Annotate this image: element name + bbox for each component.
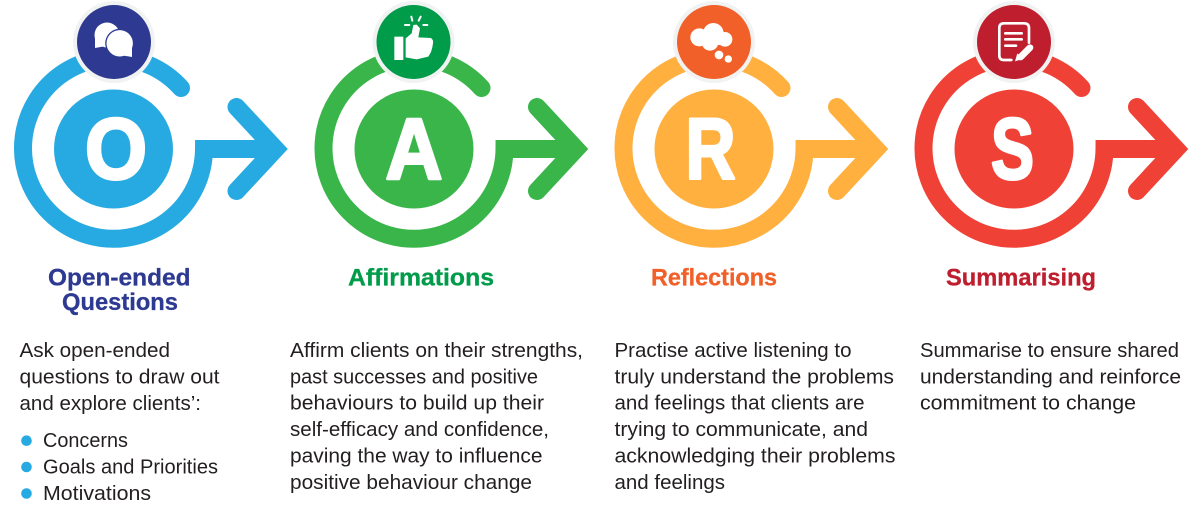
heading: open-ended questions [48,264,190,316]
text block: summarising description: Summarise to ensure shared [920,339,1179,362]
bullet list: Motivations [43,482,151,505]
text block: reflections description: and feelings [614,471,725,494]
panel: reflections [614,1,896,494]
icon: document and pen [973,1,1055,83]
icon: speech bubbles [73,1,155,83]
ring arrow O [23,58,276,239]
text block: reflections description: and feelings that clients are [614,392,864,415]
text block: affirmations description: paving the way to influence [290,444,542,467]
letter disc S [954,90,1074,208]
bullet list: Concerns [43,429,128,452]
bullet list [21,429,218,505]
icon: thought cloud [673,1,755,83]
panel: summarising [920,1,1181,415]
panel: open-ended questions [20,1,276,505]
text block: affirmations description: self-efficacy and confidence, [290,418,549,441]
text block: affirmations description: past successes and positive [290,366,538,388]
text block: open-ended description: and explore clients’: [20,392,201,415]
letter disc S: S [991,102,1034,198]
text block: reflections description: Practise active listening to [614,339,852,362]
letter disc R [654,90,774,208]
text block: open-ended description: questions to draw out [20,366,220,388]
text block: affirmations description [290,339,583,494]
text block: affirmations description: Affirm clients on their strengths, [290,339,583,362]
letter disc O: O [85,102,147,198]
heading: open-ended questions: Questions [62,289,178,316]
letter disc A [354,90,474,208]
text block: reflections description [614,339,896,494]
text block: open-ended description [20,339,220,415]
text block: reflections description: acknowledging their problems [614,444,896,467]
heading: summarising: Summarising [946,264,1096,292]
text block: reflections description: trying to communicate, and [614,418,868,441]
letter disc R: R [686,102,736,198]
text block: affirmations description: behaviours to build up their [290,392,544,415]
text block: summarising description [920,339,1181,415]
ring arrow R [624,58,876,239]
ring arrow A [324,58,576,239]
letter disc A: A [386,102,442,198]
text block: open-ended description: Ask open-ended [20,339,170,362]
bullet list: Goals and Priorities [43,456,218,478]
text block: affirmations description: positive behaviour change [290,471,532,494]
panel: affirmations [290,1,583,494]
text block: reflections description: truly understand the problems [614,366,894,388]
heading: reflections: Reflections [651,264,777,292]
heading: affirmations: Affirmations [348,264,494,292]
letter disc O [54,90,173,208]
heading: open-ended questions: Open-ended [48,264,190,292]
ring arrow S [924,58,1176,239]
text block: summarising description: commitment to change [920,392,1136,415]
icon: thumbs up [372,1,454,83]
text block: summarising description: understanding and reinforce [920,366,1181,388]
